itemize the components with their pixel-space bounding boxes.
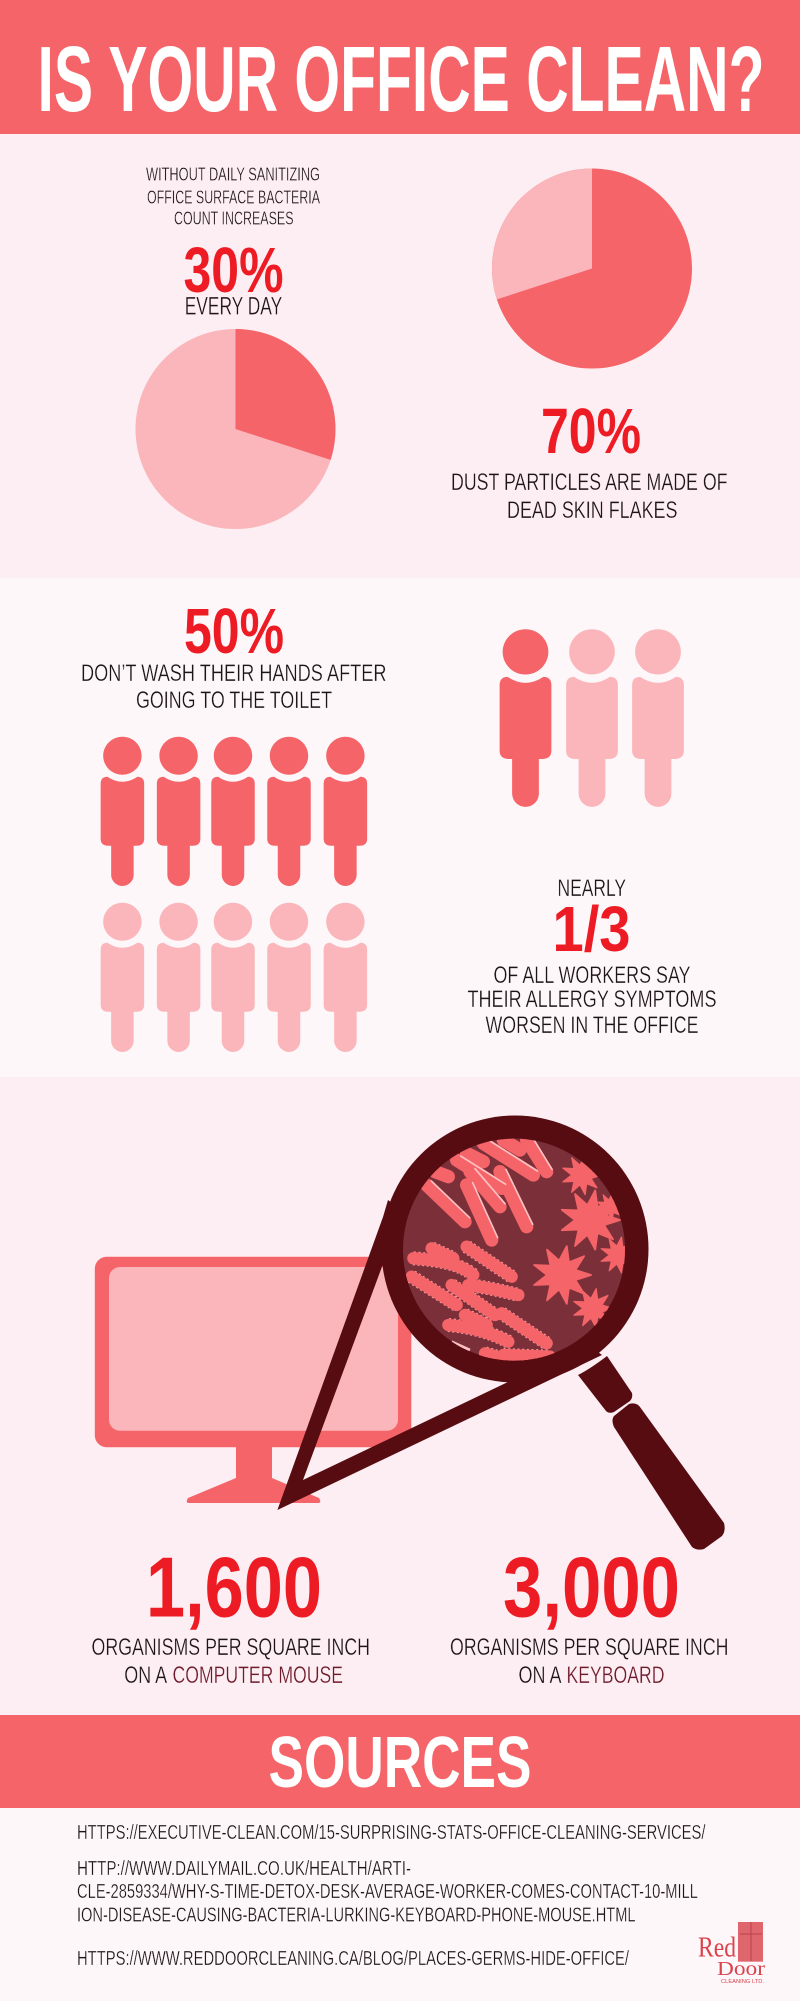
text: every day: EVERY DAY [185,292,282,320]
stat: 50%: 50% [184,595,284,667]
stat: 3,000: 3,000 [503,1540,680,1636]
bacteria inside the lens [412,1138,637,1357]
panel: hand washing and allergy statistics [0,578,800,1077]
star bacteria [533,1157,625,1326]
stat: 70%: 70% [541,395,641,467]
text: computer mouse: ORGANISMS PER SQUARE INCH [92,1634,370,1661]
panel: germs on computer equipment [92,1116,727,1683]
text: workers allergy symptoms: THEIR ALLERGY SYMPTOMS [468,986,716,1013]
text: keyboard [450,1634,728,1689]
heading: sources: SOURCES [268,1723,532,1803]
pie chart: 70 percent [492,168,692,368]
rod bacteria [427,1140,547,1240]
icons: three large people [500,629,684,807]
logo: red door cleaning: CLEANING LTD. [721,1979,764,1985]
text: keyboard: KEYBOARD [566,1662,664,1689]
icons: five dark people [101,737,367,886]
text: computer mouse: ON A [124,1662,167,1689]
text: workers allergy symptoms [468,962,716,1039]
text: workers allergy symptoms: OF ALL WORKERS SAY [494,962,690,989]
icon: magnifying glass [382,1116,725,1550]
text: don't wash their hands [81,660,386,714]
logo: red door cleaning [698,1922,765,1985]
text: without daily sanitizing: OFFICE SURFACE BACTERIA [147,188,320,208]
text: computer mouse [92,1634,370,1689]
text: keyboard: ON A [518,1662,562,1689]
logo: red door cleaning: Red [698,1933,736,1964]
icon: computer monitor [95,1257,411,1503]
text: don't wash their hands: GOING TO THE TOILET [136,687,332,714]
panel: title banner [0,0,800,134]
text: dust particles [451,469,728,524]
text: dust particles: DEAD SKIN FLAKES [507,497,678,524]
text: computer mouse: COMPUTER MOUSE [172,1662,343,1689]
text: workers allergy symptoms: WORSEN IN THE OFFICE [486,1012,698,1039]
stat: 30%: 30% [184,234,284,306]
logo: red door cleaning: Door [717,1958,765,1980]
panel: sources banner [0,1715,800,1808]
source link 2: HTTP://WWW.DAILYMAIL.CO.UK/HEALTH/ARTI- [77,1857,411,1880]
text: don't wash their hands: DON’T WASH THEIR HANDS AFTER [81,660,386,687]
panel: source links [0,1808,800,2001]
text: nearly: NEARLY [558,875,626,902]
text: without daily sanitizing [146,164,320,228]
bumpy bacteria [412,1247,550,1357]
text: without daily sanitizing: WITHOUT DAILY SANITIZING [146,164,320,184]
icon: magnifier beam [277,1200,602,1510]
source link 2 [77,1857,698,1926]
panel: bacteria and dust statistics [0,134,800,578]
text: without daily sanitizing: COUNT INCREASES [174,208,294,228]
stat: 1,600: 1,600 [146,1540,322,1636]
stat: 1/3: 1/3 [552,893,630,965]
icons: five light people [101,903,367,1052]
pie chart: 30 percent [136,329,336,529]
